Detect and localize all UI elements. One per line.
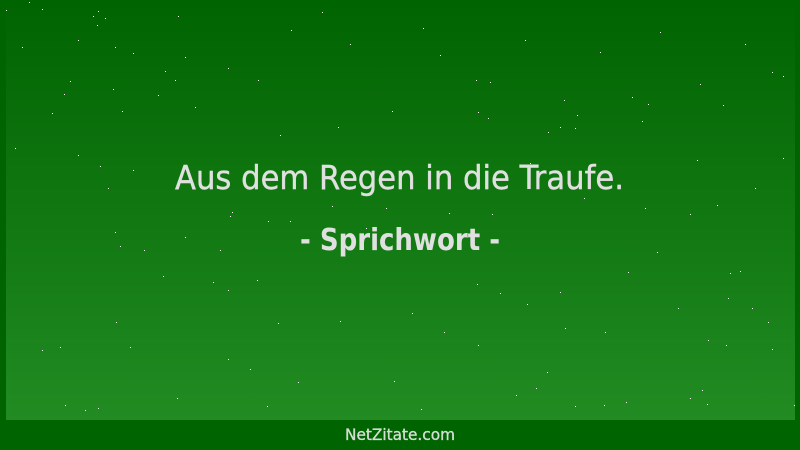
footer site name: NetZitate.com [345,425,455,444]
quote text: Aus dem Regen in die Traufe. [175,158,624,197]
author: - Sprichwort - [300,223,500,258]
